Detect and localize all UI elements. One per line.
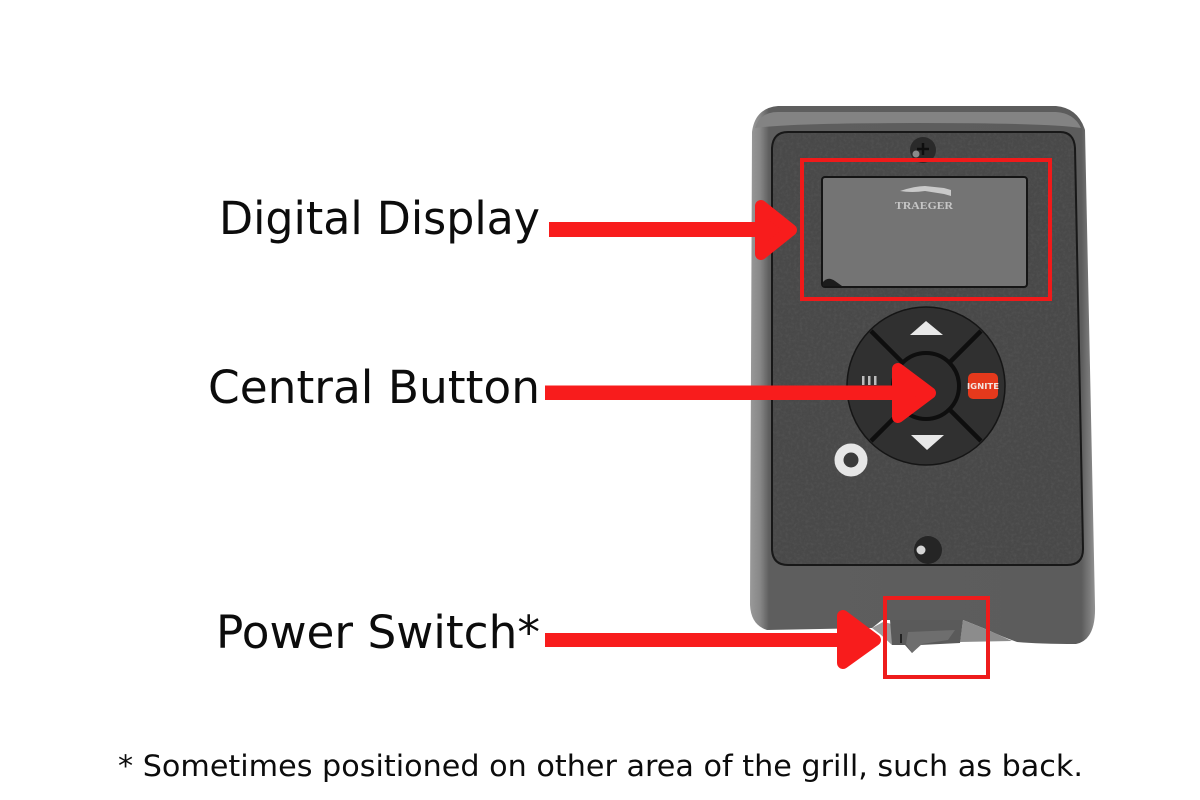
faceplate <box>772 132 1083 565</box>
label: digital display: Digital Display <box>219 192 540 245</box>
Traeger logo mark <box>900 186 951 196</box>
label: power switch: Power Switch* <box>216 606 540 659</box>
controller device photo <box>750 106 1095 653</box>
arrow: digital display <box>549 206 791 254</box>
central button <box>893 353 959 419</box>
bottom screw <box>914 536 942 564</box>
top screw <box>910 137 936 163</box>
label: central button: Central Button <box>208 361 540 414</box>
faceplate outline <box>772 132 1083 565</box>
arrow: power switch <box>545 616 875 663</box>
left switch recess wedge <box>872 622 892 645</box>
footnote: * Sometimes positioned on other area of the grill, such as back. <box>118 749 1083 783</box>
white indicator ring <box>839 448 863 472</box>
digital display screen <box>822 177 1027 287</box>
Traeger wordmark: TRAEGER <box>895 201 954 212</box>
power switch <box>890 620 963 653</box>
down button arrow <box>911 435 944 450</box>
menu icon <box>862 376 876 385</box>
arrow: central button <box>545 369 930 417</box>
up button arrow <box>910 321 943 335</box>
housing top rim highlight <box>755 112 1081 128</box>
highlight box: digital display <box>802 160 1050 299</box>
ignite button <box>967 373 999 399</box>
highlight box: power switch <box>885 598 988 677</box>
ignite button: IGNITE <box>967 382 999 391</box>
right switch recess wedge <box>960 620 1012 642</box>
control dial <box>847 307 1005 465</box>
display corner shadow <box>823 279 842 286</box>
device housing <box>750 106 1095 644</box>
